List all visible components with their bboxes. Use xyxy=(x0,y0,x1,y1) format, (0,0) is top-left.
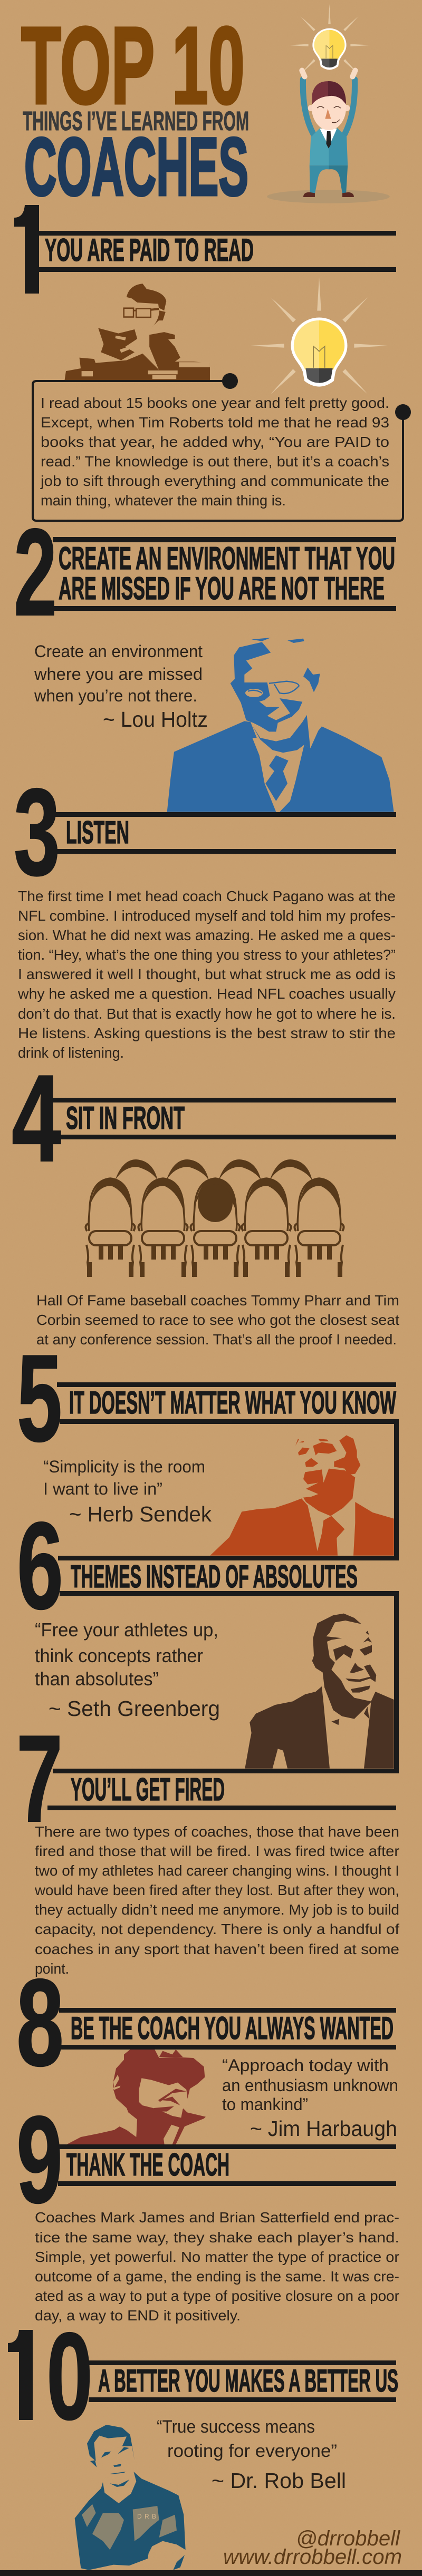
quote: Lou Holtz: Create an environment xyxy=(34,642,203,661)
body text 7 xyxy=(34,1823,399,1977)
heading 3 xyxy=(55,812,396,854)
body text 7: they actually didn’t need me anymore. My job is to build xyxy=(35,1901,399,1918)
body text 1: I read about 15 books one year and felt pretty good. xyxy=(41,395,389,411)
body text 1: Except, when Tim Roberts told me that he read 93 xyxy=(41,414,389,431)
quote: Jim Harbaugh: an enthusiasm unknown xyxy=(222,2076,398,2095)
icon: man holding lightbulb xyxy=(267,4,390,203)
quote: Dr. Rob Bell: rooting for everyone” xyxy=(167,2441,337,2461)
quote: Lou Holtz: where you are missed xyxy=(34,665,203,684)
body text 7: two of my athletes had career changing wins. I thought I xyxy=(35,1862,399,1879)
quote frame 5 xyxy=(58,1419,399,1560)
body text 7: capacity, not dependency. There is only a handful of xyxy=(35,1921,399,1937)
quote frame 6 xyxy=(53,1591,399,1773)
quote: Jim Harbaugh: “Approach today with xyxy=(222,2056,389,2075)
body text 9: Coaches Mark James and Brian Satterfield end prac- xyxy=(35,2209,399,2226)
section 7: you'll get fired xyxy=(16,1709,399,1977)
quote: Dr. Rob Bell: ~ Dr. Rob Bell xyxy=(212,2468,346,2493)
heading 1: YOU ARE PAID TO READ xyxy=(45,232,254,268)
body text 1: books that year, he added why, “You are PAID to xyxy=(41,434,389,450)
quote: Dr. Rob Bell xyxy=(157,2417,346,2493)
body text 9: day, a way to END it positively. xyxy=(35,2307,241,2324)
icon: man reading among books xyxy=(64,284,210,380)
numeral 10: 0 xyxy=(46,2307,93,2445)
numeral 6: 6 xyxy=(17,1496,63,1635)
body text 9: ated as a way to put a type of positive closure on a poor xyxy=(35,2288,399,2304)
numeral 9: 9 xyxy=(16,2090,63,2229)
quote: Lou Holtz: when you’re not there. xyxy=(34,686,197,705)
body text 9: outcome of a game, the ending is the same. It was cre- xyxy=(35,2268,399,2285)
quote: Herb Sendek: “Simplicity is the room xyxy=(43,1457,205,1476)
section 1: you are paid to read xyxy=(14,181,411,521)
portrait: Dr. Rob Bell xyxy=(75,2425,186,2570)
heading 9: THANK THE COACH xyxy=(66,2147,229,2182)
section 2: create an environment xyxy=(14,503,396,812)
body text 7: There are two types of coaches, those that have been xyxy=(35,1823,399,1840)
body text 4: at any conference session. That’s all the proof I needed. xyxy=(36,1331,397,1348)
body text 4: Hall Of Fame baseball coaches Tommy Pharr and Tim xyxy=(36,1292,399,1309)
numeral 5: 5 xyxy=(17,1329,62,1467)
numeral 7: 7 xyxy=(16,1709,63,1848)
quote: Lou Holtz: ~ Lou Holtz xyxy=(103,707,208,731)
quote: Seth Greenberg: ~ Seth Greenberg xyxy=(49,1696,220,1721)
portrait: Lou Holtz xyxy=(167,638,394,812)
numeral 10 xyxy=(8,2330,90,2421)
section 3: listen xyxy=(14,763,396,1061)
portrait: Seth Greenberg xyxy=(245,1614,394,1769)
body text 3: drink of listening. xyxy=(18,1045,124,1061)
footer handles xyxy=(223,2527,402,2569)
section 4: sit in front xyxy=(12,1049,399,1348)
portrait: Dr. Rob Bell: DRB xyxy=(137,2513,156,2520)
title xyxy=(21,5,249,213)
body text 3: why he asked me a question. Head NFL coaches usually xyxy=(17,985,396,1002)
body text 3: I answered it well I thought, but what struck me as odd is xyxy=(18,966,396,982)
heading 4: SIT IN FRONT xyxy=(66,1100,185,1136)
body text 9: tice the same way, they shake each player’s hand. xyxy=(35,2229,399,2246)
body text 7: fired and those that will be fired. I was fired twice after xyxy=(35,1843,399,1859)
quote: Lou Holtz xyxy=(34,642,208,731)
section 6: themes instead of absolutes xyxy=(17,1496,399,1773)
heading 7: YOU’LL GET FIRED xyxy=(71,1772,225,1807)
numeral 3: 3 xyxy=(14,763,60,901)
footer handles: www.drrobbell.com xyxy=(223,2545,402,2569)
quote: Herb Sendek: I want to live in” xyxy=(43,1479,162,1498)
body text 7: coaches in any sport that haven’t been fired at some xyxy=(35,1941,399,1957)
portrait: Jim Harbaugh xyxy=(67,2050,206,2144)
title: THINGS I’VE LEARNED FROM xyxy=(23,106,249,136)
numeral 4: 4 xyxy=(12,1049,61,1187)
quote: Seth Greenberg: than absolutes” xyxy=(35,1668,159,1690)
body text 3 xyxy=(17,888,396,1061)
quote: Jim Harbaugh: to mankind” xyxy=(222,2095,308,2114)
numeral 2: 2 xyxy=(14,503,57,641)
section 9: thank the coach xyxy=(16,2090,399,2324)
body text 3: sion. What he did next was amazing. He asked me a ques- xyxy=(18,927,396,943)
body text 4 xyxy=(36,1292,399,1348)
heading 4 xyxy=(53,1098,396,1139)
portrait: Herb Sendek xyxy=(210,1435,394,1556)
body text 7: point. xyxy=(35,1960,69,1977)
numeral 1 xyxy=(14,205,39,294)
text box with dots xyxy=(33,373,411,521)
body text 1: job to sift through everything and communicate the xyxy=(40,473,389,489)
section 8: be the coach you always wanted xyxy=(16,1953,398,2144)
body text 3: NFL combine. I introduced myself and told him my profes- xyxy=(18,908,396,924)
numeral 10: 1 xyxy=(11,2307,43,2445)
body text 9 xyxy=(35,2209,399,2324)
body text 9: Simple, yet powerful. No matter the type of practice or xyxy=(35,2249,399,2265)
icon: rows of chairs xyxy=(85,1159,344,1277)
section 10: a better you makes a better us xyxy=(8,2307,402,2570)
quote: Herb Sendek xyxy=(43,1457,212,1526)
numeral 8: 8 xyxy=(16,1953,64,2092)
body text 1 xyxy=(40,395,389,509)
quote: Seth Greenberg: “Free your athletes up, xyxy=(35,1619,218,1641)
body text 1: read.” The knowledge is out there, but it’s a coach’s xyxy=(41,453,389,470)
quote: Seth Greenberg xyxy=(35,1619,220,1721)
quote: Dr. Rob Bell: “True success means xyxy=(157,2417,315,2437)
body text 3: The first time I met head coach Chuck Pagano was at the xyxy=(18,888,396,904)
heading 2 xyxy=(53,537,396,611)
body text 3: tion. “Hey, what’s the one thing you stress to your athletes?” xyxy=(18,947,396,963)
body text 7: would have been fired after they lost. But after they won, xyxy=(34,1882,399,1898)
quote: Jim Harbaugh: ~ Jim Harbaugh xyxy=(250,2116,397,2141)
bottom band xyxy=(0,2570,422,2576)
body text 4: Corbin seemed to race to see who got the closest seat xyxy=(36,1312,399,1328)
body text 1: main thing, whatever the main thing is. xyxy=(41,492,286,509)
footer handles: @drrobbell xyxy=(296,2527,400,2550)
icon: big lightbulb xyxy=(251,277,388,396)
quote: Seth Greenberg: think concepts rather xyxy=(35,1645,203,1666)
title: TOP 10 xyxy=(21,5,245,127)
body text 3: don’t do that. But that is exactly how he got to where he is. xyxy=(18,1006,396,1022)
quote: Jim Harbaugh xyxy=(222,2056,398,2141)
heading 3: LISTEN xyxy=(66,815,129,850)
section 1: you are paid to read: 1 xyxy=(16,181,49,320)
quote: Herb Sendek: ~ Herb Sendek xyxy=(69,1502,212,1526)
section 5: it doesn't matter what you know xyxy=(17,1329,399,1560)
body text 3: He listens. Asking questions is the best straw to stir the xyxy=(18,1025,396,1041)
